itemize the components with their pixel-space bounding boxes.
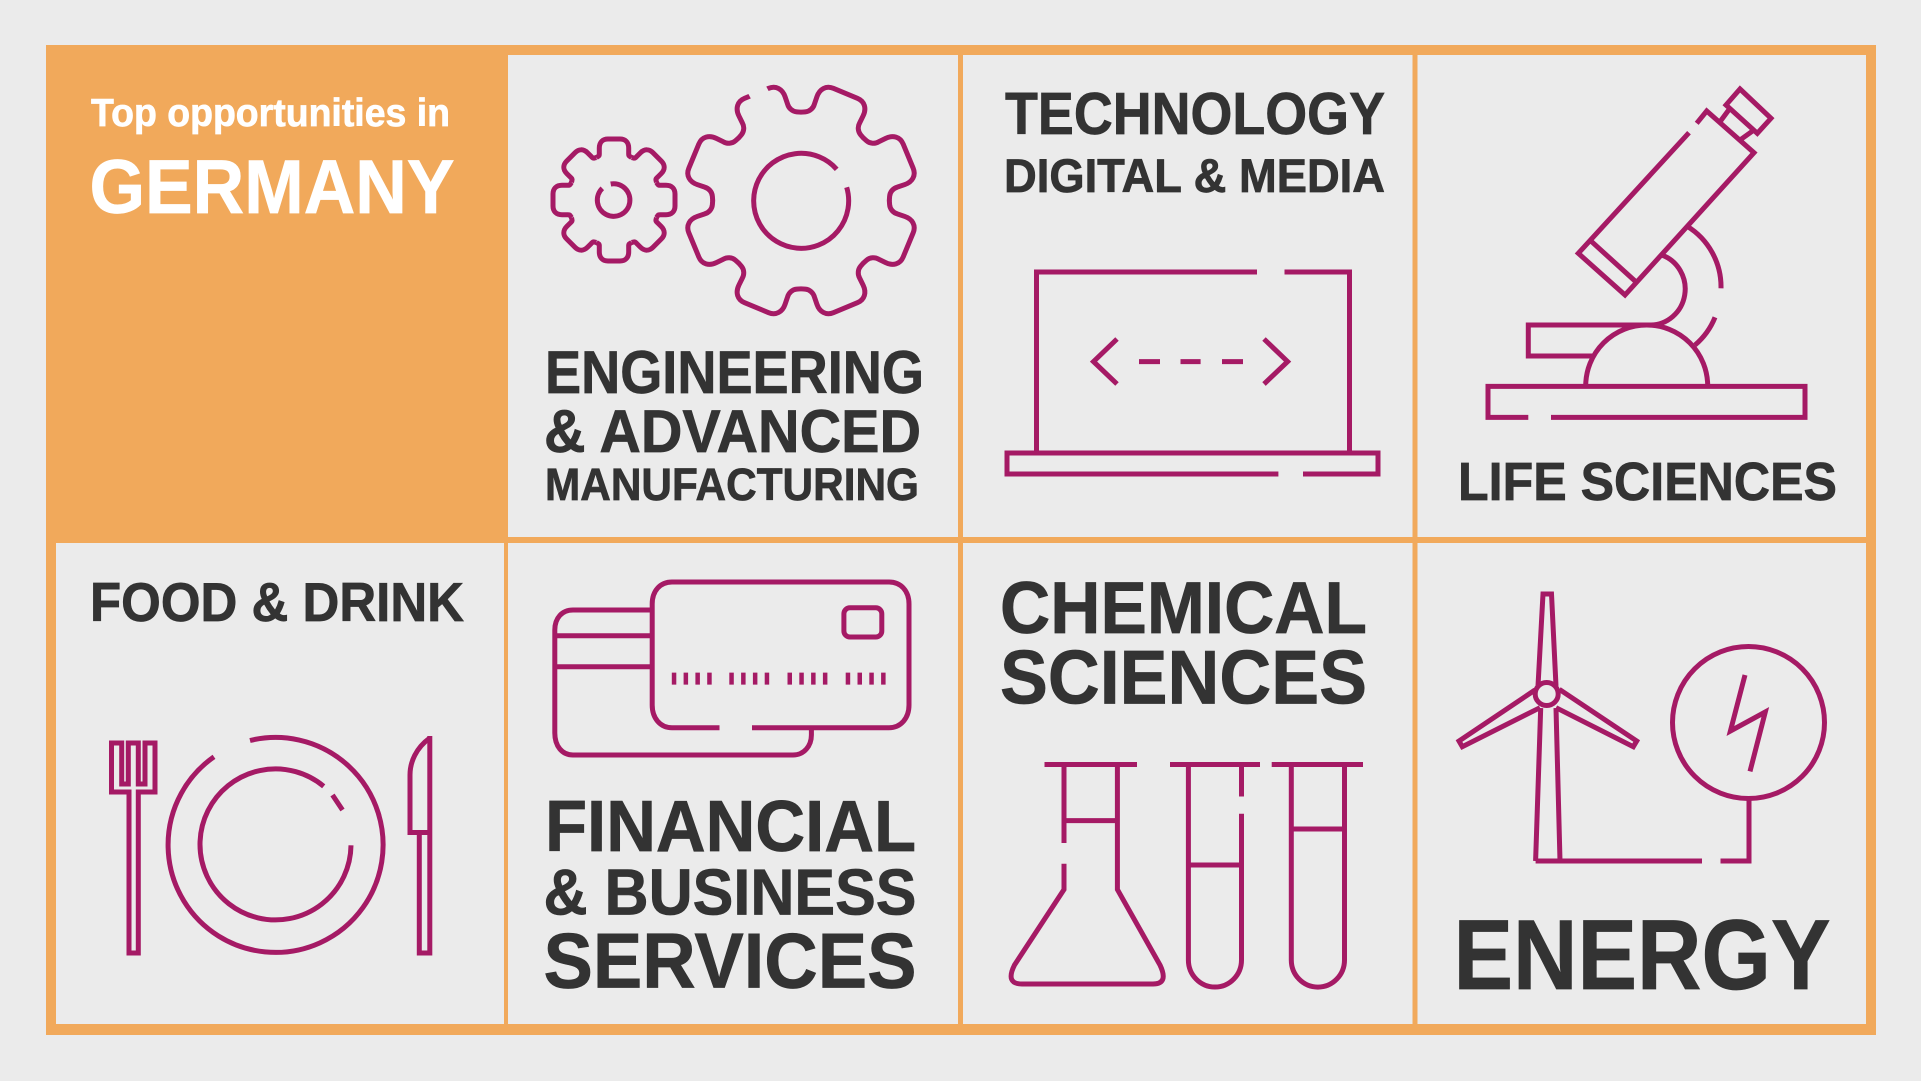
heading: life sciences: LIFE SCIENCES bbox=[1458, 452, 1837, 512]
icon: microscope bbox=[1488, 89, 1805, 417]
icon: fork, plate and knife bbox=[112, 736, 432, 953]
panel: energy bbox=[1418, 543, 1866, 1024]
heading: technology, digital and media bbox=[1004, 81, 1385, 202]
title: top opportunities in: Top opportunities in bbox=[91, 92, 450, 135]
heading: engineering and advanced manufacturing: MANUFACTURING bbox=[545, 459, 919, 510]
heading: engineering and advanced manufacturing bbox=[544, 339, 924, 510]
panel: engineering and advanced manufacturing bbox=[508, 55, 958, 537]
heading: food and drink: FOOD & DRINK bbox=[90, 571, 464, 633]
panel: financial and business services bbox=[508, 543, 958, 1024]
heading: technology, digital and media: TECHNOLOGY bbox=[1005, 81, 1385, 147]
heading: financial and business services bbox=[544, 787, 916, 1004]
heading: energy: ENERGY bbox=[1454, 899, 1830, 1010]
title: Germany: GERMANY bbox=[90, 145, 454, 230]
panel: title bbox=[46, 45, 508, 543]
heading: financial and business services: SERVICES bbox=[544, 916, 916, 1004]
panel: technology, digital and media bbox=[963, 55, 1412, 537]
heading: chemical sciences bbox=[1000, 568, 1367, 720]
heading: financial and business services: & BUSINESS bbox=[544, 856, 916, 928]
heading: engineering and advanced manufacturing: & ADVANCED bbox=[544, 398, 921, 465]
heading: engineering and advanced manufacturing: ENGINEERING bbox=[545, 339, 924, 406]
icon: credit cards bbox=[555, 582, 909, 755]
heading: financial and business services: FINANCIAL bbox=[545, 787, 916, 867]
icon: laptop with code bbox=[1007, 272, 1378, 474]
heading: chemical sciences: SCIENCES bbox=[1000, 636, 1367, 720]
panel: life sciences bbox=[1418, 55, 1866, 537]
heading: technology, digital and media: DIGITAL & MEDIA bbox=[1004, 149, 1385, 202]
icon: flask and test tubes bbox=[1011, 764, 1363, 987]
icon: gears bbox=[553, 80, 921, 321]
panel: chemical sciences bbox=[963, 543, 1412, 1024]
panel: food and drink bbox=[56, 543, 504, 1024]
heading: chemical sciences: CHEMICAL bbox=[1000, 568, 1367, 649]
icon: wind turbine and power bbox=[1459, 594, 1824, 861]
